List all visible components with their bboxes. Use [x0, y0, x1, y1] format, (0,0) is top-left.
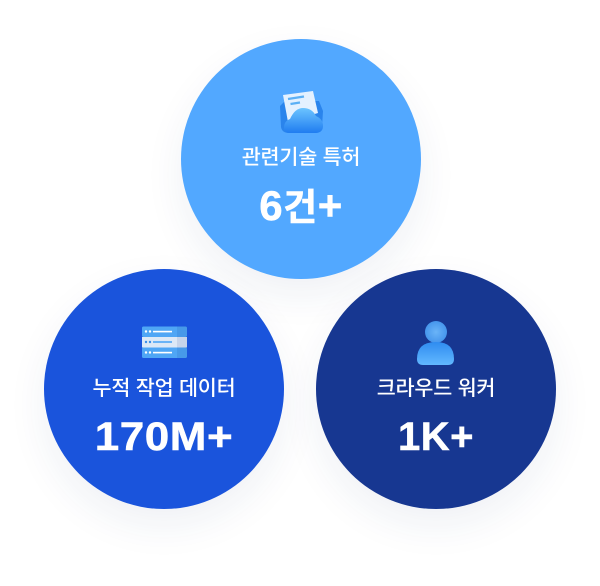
icon: server stack — [142, 326, 187, 358]
label: workers: 크라우드 워커 — [377, 377, 495, 400]
value: patents — [259, 182, 343, 229]
panel: data circle — [44, 269, 284, 509]
value: patents: + — [318, 182, 343, 229]
panel: workers circle — [316, 269, 556, 509]
value: patents: 건 — [283, 187, 318, 228]
label: data: 누적 작업 데이터 — [93, 377, 235, 400]
icon: person — [417, 321, 454, 365]
label: patents: 관련기술 특허 — [242, 146, 360, 169]
panel: patents circle — [181, 39, 421, 279]
value: patents: 6 — [259, 182, 283, 229]
value: workers: 1K+ — [398, 415, 474, 459]
icon: envelope with document — [280, 91, 323, 133]
value: data: 170M+ — [95, 415, 233, 459]
